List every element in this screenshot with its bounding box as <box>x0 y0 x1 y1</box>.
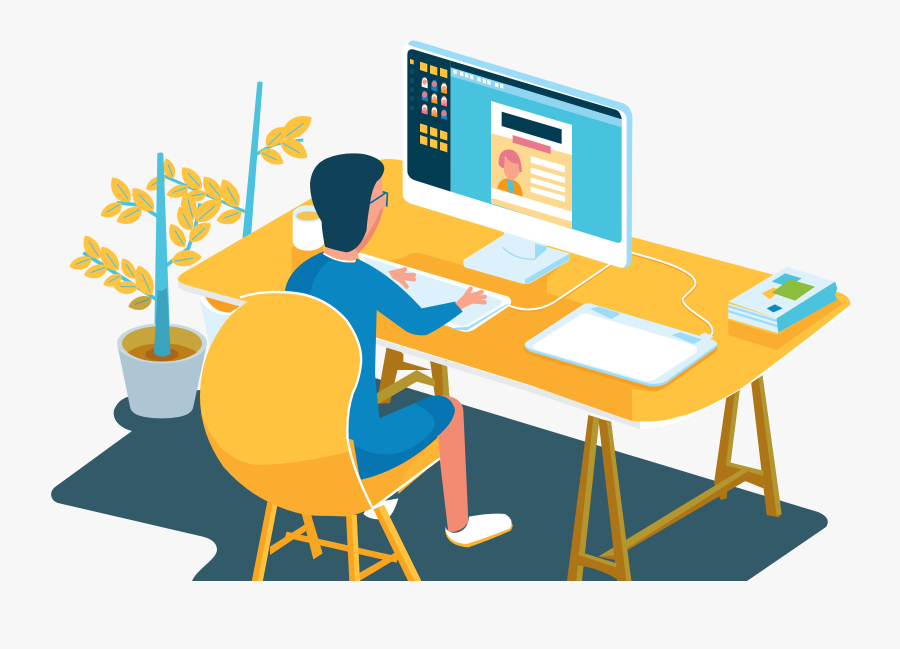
person <box>285 153 513 547</box>
chair seat <box>200 397 440 517</box>
collar <box>323 253 356 261</box>
body <box>285 252 463 480</box>
coffee cup <box>292 205 324 273</box>
profile page <box>491 101 572 229</box>
far leg <box>437 395 468 533</box>
sidebar icons <box>410 68 414 111</box>
right desk legs <box>567 374 782 583</box>
screen canvas <box>451 67 622 243</box>
keyboard <box>357 252 511 332</box>
books <box>728 267 843 350</box>
screen top bar <box>451 61 622 119</box>
monitor back rim <box>408 41 632 268</box>
back trestle <box>714 374 782 517</box>
front plant <box>69 152 222 324</box>
illustration: designer working at a desk <box>51 40 850 581</box>
neck and face <box>323 175 387 263</box>
sidebar tiles <box>410 59 447 152</box>
chair legs <box>252 502 422 582</box>
waste bin <box>199 296 240 346</box>
glasses <box>370 192 387 207</box>
shaded trunk <box>154 287 171 357</box>
profile portrait <box>497 149 523 197</box>
chair white trim <box>240 292 440 508</box>
body shading <box>285 252 332 293</box>
desk front edge white <box>726 374 762 398</box>
stretcher bar <box>598 468 747 560</box>
desk shadow area <box>376 253 660 421</box>
hidden shoe <box>363 498 398 519</box>
rear desk legs <box>377 347 449 405</box>
hair <box>310 153 384 252</box>
monitor stand <box>463 230 570 284</box>
hand left <box>392 269 414 287</box>
drawing tablet <box>524 303 717 391</box>
floor rug <box>51 378 828 581</box>
toolbar buttons <box>453 69 503 89</box>
desk <box>178 159 850 429</box>
hand right <box>458 289 485 307</box>
monitor bezel <box>403 45 627 268</box>
monitor <box>403 41 632 268</box>
screen sidebar <box>407 49 451 192</box>
shorts shading <box>352 396 455 480</box>
shoe <box>445 514 513 547</box>
back plant <box>146 82 312 238</box>
avatar thumbnails <box>422 77 447 120</box>
scene <box>51 41 850 583</box>
desk top <box>178 159 850 422</box>
cable right <box>510 253 713 337</box>
face shading <box>355 208 383 253</box>
seat highlight <box>398 437 440 494</box>
plant pot <box>117 287 207 418</box>
chair lower shade <box>200 397 373 516</box>
chair <box>200 292 440 582</box>
screen toolbar <box>451 67 622 127</box>
chair back <box>200 292 362 465</box>
front trestle <box>567 415 632 583</box>
desk front edge grey <box>178 278 640 429</box>
